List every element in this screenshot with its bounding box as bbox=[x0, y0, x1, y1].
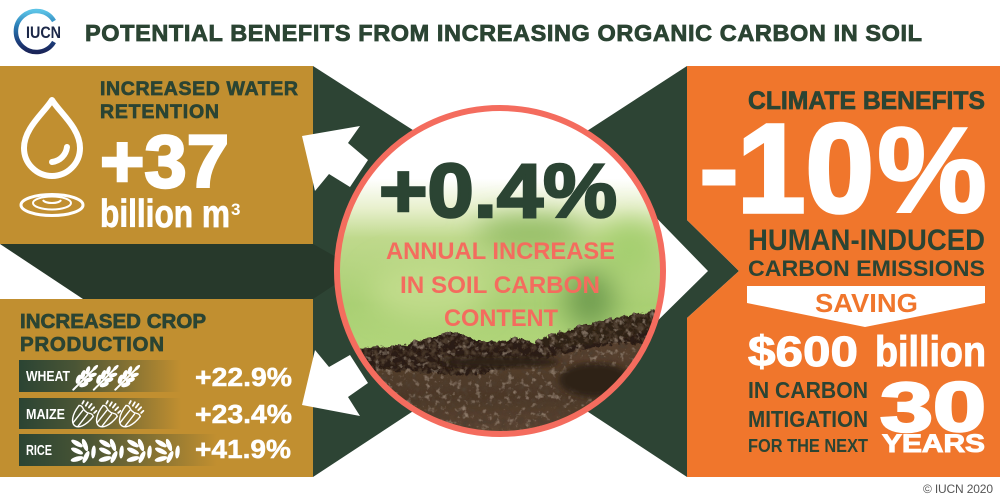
title: POTENTIAL BENEFITS FROM INCREASING ORGANIC CARBON IN SOIL bbox=[85, 20, 922, 46]
text: annual increase in soil carbon content bbox=[386, 238, 615, 332]
photo: blurred green field and soil bbox=[340, 134, 660, 431]
arrow: to water retention bbox=[302, 126, 368, 191]
text: annual increase in soil carbon content: CONTENT bbox=[444, 305, 558, 332]
stat: +0.4%: +0.4% bbox=[379, 149, 617, 234]
row: wheat: +22.9% bbox=[195, 362, 292, 392]
icon: water drop bbox=[24, 100, 80, 176]
stat unit: billion m3: billion m bbox=[100, 193, 230, 236]
text: in carbon mitigation for the next: IN CARBON bbox=[748, 377, 868, 403]
text: in carbon mitigation for the next: MITIGATION bbox=[748, 406, 868, 432]
arrow: right white chevron bbox=[640, 201, 708, 338]
central circle: soil photo and headline bbox=[335, 106, 670, 440]
panel: crop production bbox=[0, 299, 313, 477]
copyright: © IUCN 2020 bbox=[923, 482, 993, 496]
stat: -10%: % bbox=[877, 102, 987, 238]
heading: crop production bbox=[20, 310, 206, 356]
row: maize: +23.4% bbox=[195, 399, 292, 429]
dark connector: left side bbox=[0, 66, 430, 477]
heading: crop production: PRODUCTION bbox=[20, 333, 164, 356]
stat: +37: +37 bbox=[100, 120, 229, 203]
heading: water retention: RETENTION bbox=[100, 101, 219, 123]
row: maize: MAIZE bbox=[26, 407, 65, 423]
banner: saving bbox=[747, 286, 985, 327]
text: annual increase in soil carbon content: ANNUAL INCREASE bbox=[386, 238, 615, 265]
row: rice: +41.9% bbox=[195, 434, 291, 464]
row: maize bbox=[19, 398, 292, 431]
text: human-induced carbon emissions: HUMAN-INDUCED bbox=[748, 224, 985, 257]
stat unit: billion m3: 3 bbox=[231, 200, 240, 219]
heading: climate benefits: CLIMATE BENEFITS bbox=[748, 87, 985, 115]
icon: water ripples bbox=[21, 194, 83, 216]
stat: -10%: - bbox=[698, 96, 740, 237]
stat: $600 billion: $600 bbox=[748, 328, 858, 376]
stat: -10%: 10 bbox=[737, 98, 874, 239]
text: human-induced carbon emissions: CARBON EMISSIONS bbox=[748, 256, 985, 281]
row: rice bbox=[19, 434, 291, 466]
arrow: to crop production bbox=[302, 350, 368, 416]
heading: water retention: INCREASED WATER bbox=[100, 78, 298, 100]
stat: $600 billion: billion bbox=[875, 328, 986, 376]
soil: dark hollow bbox=[559, 363, 631, 397]
logo: IUCN bbox=[16, 11, 61, 52]
panel: climate benefits bbox=[687, 66, 1000, 477]
text: annual increase in soil carbon content: IN SOIL CARBON bbox=[400, 272, 600, 299]
dark connector: right side bbox=[570, 66, 739, 477]
heading: crop production: INCREASED CROP bbox=[20, 310, 206, 333]
soil: mid-brown foreground bbox=[375, 342, 642, 431]
row: wheat: WHEAT bbox=[26, 369, 70, 385]
row: wheat bbox=[19, 360, 292, 395]
heading: water retention bbox=[100, 78, 298, 123]
banner: saving: SAVING bbox=[815, 288, 918, 318]
logo: IUCN: IUCN bbox=[26, 23, 61, 42]
panel: water retention bbox=[0, 66, 313, 244]
soil: front mound bbox=[360, 331, 643, 377]
text: human-induced carbon emissions bbox=[748, 224, 985, 281]
text: in carbon mitigation for the next: FOR THE NEXT bbox=[748, 436, 868, 456]
row: rice: RICE bbox=[26, 443, 52, 459]
stat: 30 years: 30 bbox=[880, 368, 986, 446]
soil: back ridge bbox=[534, 309, 655, 348]
stat: 30 years: YEARS bbox=[882, 430, 985, 458]
stat: -10% bbox=[698, 96, 987, 239]
text: in carbon mitigation for the next bbox=[748, 377, 868, 456]
stat: $600 billion bbox=[748, 328, 986, 376]
stat: 30 years bbox=[880, 368, 986, 458]
